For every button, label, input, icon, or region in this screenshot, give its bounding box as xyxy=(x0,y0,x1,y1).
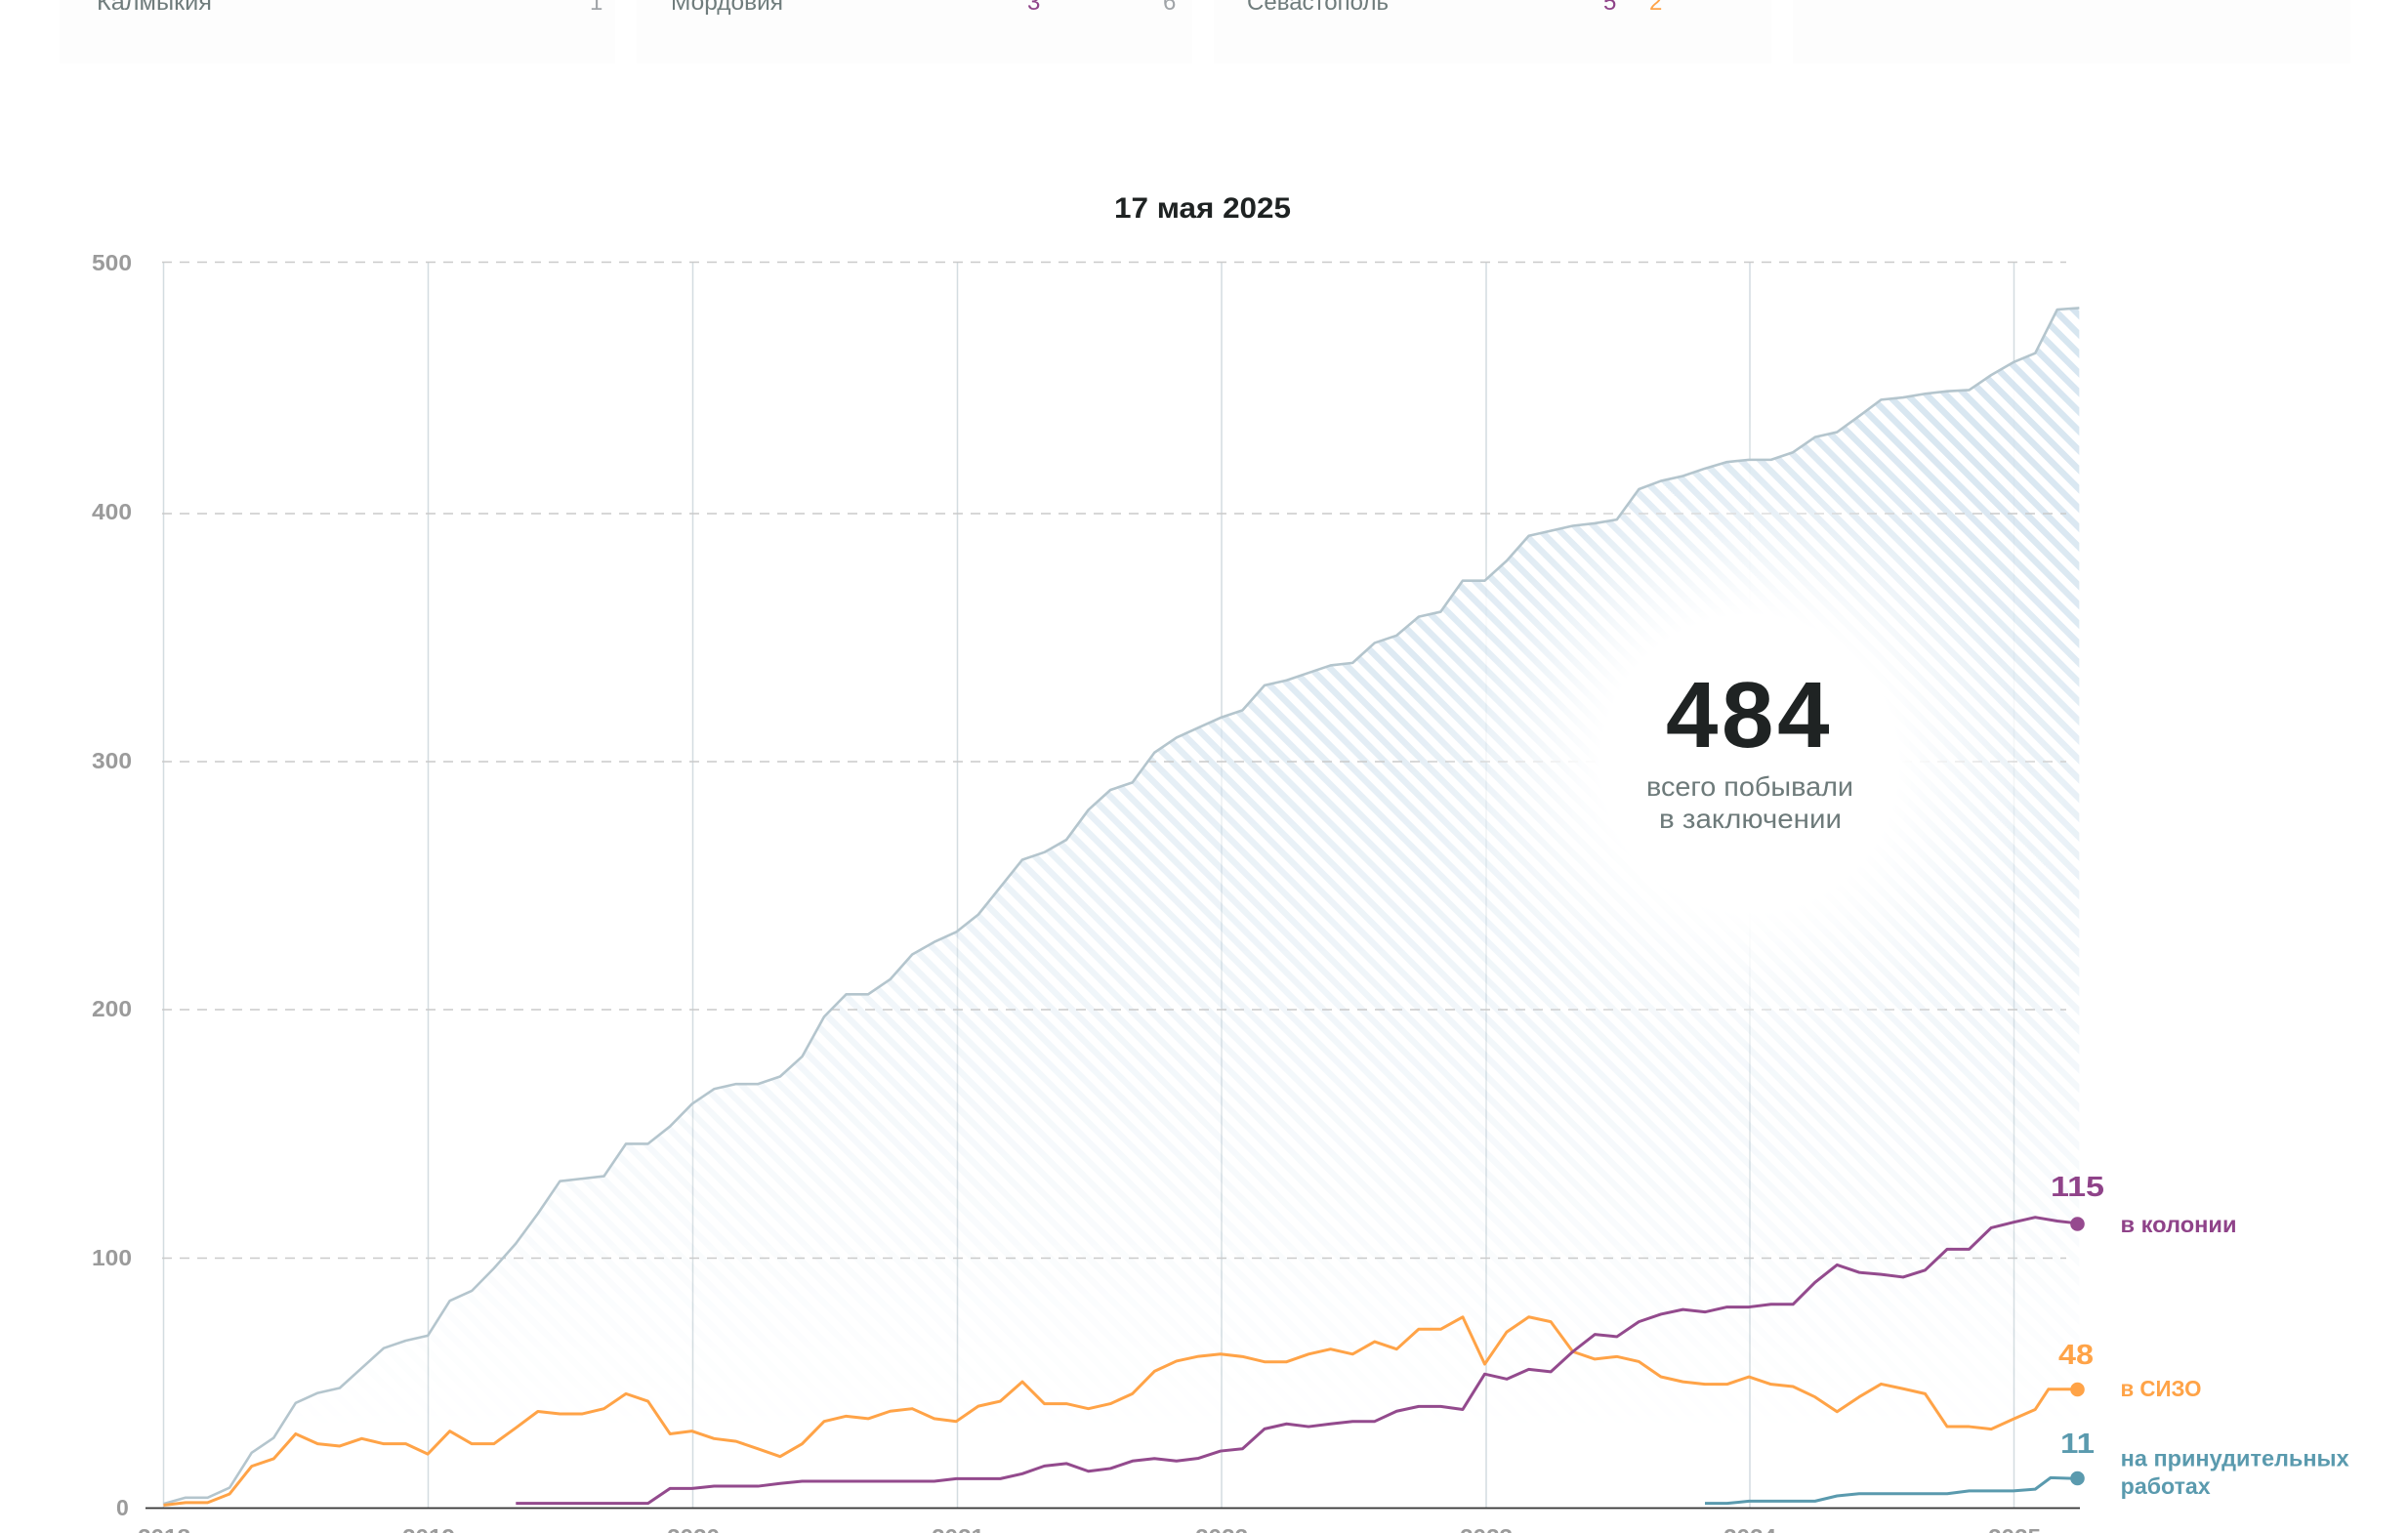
card: empty xyxy=(1793,0,2350,63)
series label: на принудительных работах 11: работах xyxy=(2121,1473,2211,1499)
vertical year grid lines xyxy=(164,262,2014,1508)
series label: в колонии 115 xyxy=(2051,1172,2236,1237)
panel: clipped table cards at top xyxy=(60,0,2350,63)
line: in penal colony xyxy=(516,1218,2079,1504)
y axis labels: 0 xyxy=(116,1495,129,1520)
series label: на принудительных работах 11 xyxy=(2060,1429,2349,1499)
series label: на принудительных работах 11: 11 xyxy=(2060,1429,2095,1460)
y axis labels xyxy=(92,250,132,1520)
total callout: 484: в заключении xyxy=(1659,804,1842,834)
total callout: 484: 484 xyxy=(1666,663,1830,767)
series label: в колонии 115: 115 xyxy=(2051,1172,2104,1203)
y axis labels: 100 xyxy=(92,1245,132,1270)
series label: в СИЗО 48: в СИЗО xyxy=(2121,1376,2201,1401)
chart title: 17 мая 2025 xyxy=(1114,192,1291,225)
y axis labels: 400 xyxy=(92,499,132,524)
line: in forced labour xyxy=(1705,1477,2079,1504)
card: Севастополь xyxy=(1214,0,1771,63)
white glow behind total number xyxy=(1398,412,2101,1115)
chart: people imprisoned over time xyxy=(92,250,2349,1533)
y axis labels: 300 xyxy=(92,748,132,773)
y axis labels: 500 xyxy=(92,250,132,275)
line: in pre-trial detention (СИЗО) xyxy=(164,1317,2079,1505)
x axis baseline xyxy=(145,1508,2080,1510)
horizontal dashed grid lines xyxy=(162,262,2066,1258)
series label: в колонии 115: в колонии xyxy=(2121,1212,2236,1237)
x axis year labels xyxy=(138,1524,2041,1533)
total callout: 484: всего побывали xyxy=(1646,771,1853,802)
line: total imprisoned xyxy=(164,308,2079,1504)
total callout: 484 xyxy=(1646,663,1853,834)
hatched area: total ever imprisoned xyxy=(618,310,2080,1165)
series label: на принудительных работах 11: на принудительных xyxy=(2121,1446,2349,1471)
card: Калмыкия xyxy=(60,0,615,63)
series label: в СИЗО 48: 48 xyxy=(2058,1340,2094,1371)
card: Мордовия xyxy=(637,0,1192,63)
y axis labels: 200 xyxy=(92,996,132,1021)
series label: в СИЗО 48 xyxy=(2058,1340,2201,1401)
